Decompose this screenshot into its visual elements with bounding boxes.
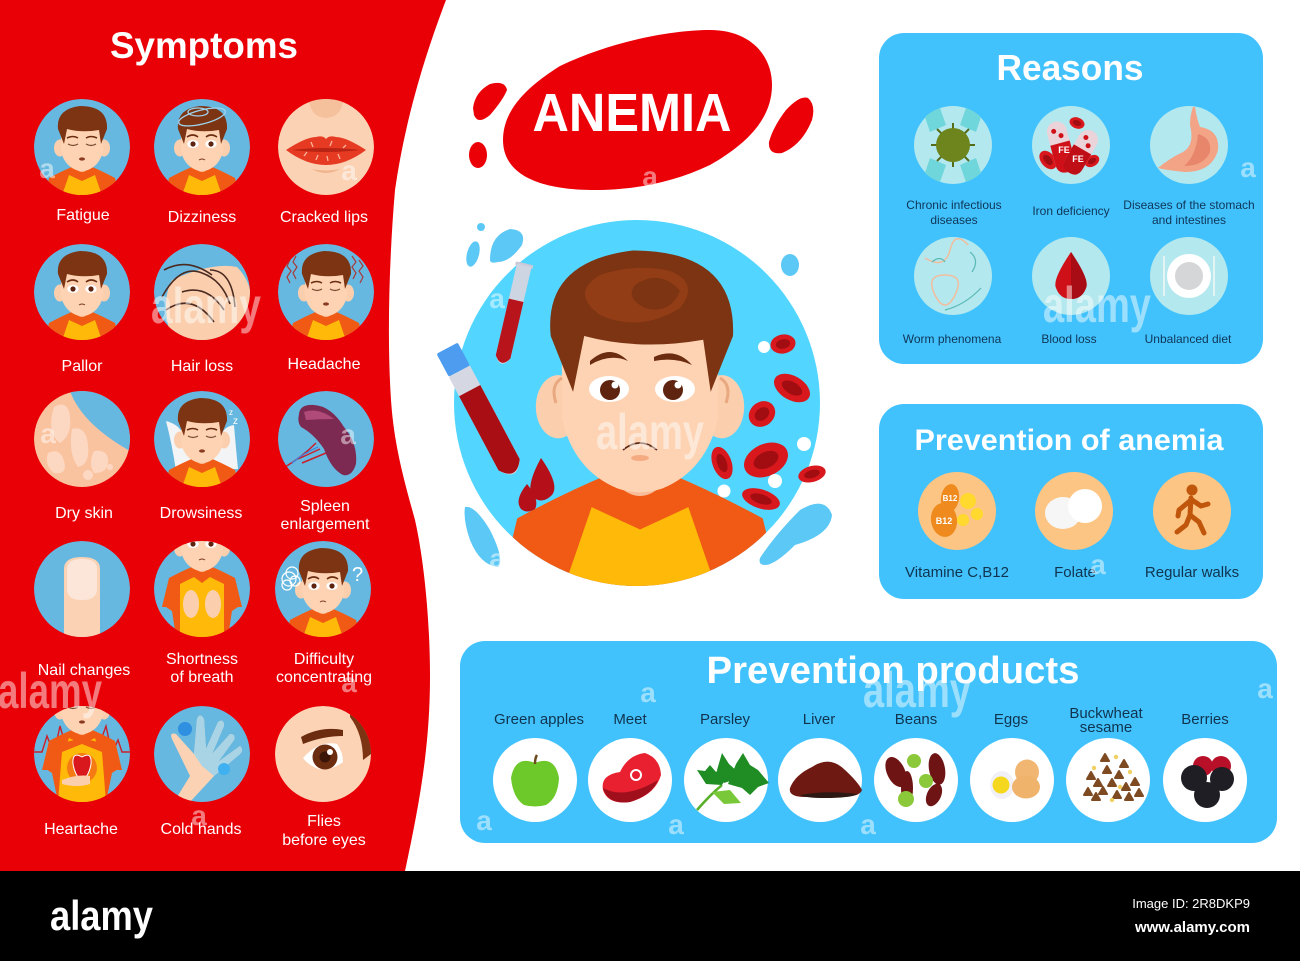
heading: Prevention products [706, 650, 1080, 692]
symptom: headache [278, 244, 374, 373]
symptom: flies before eyes: before eyes [282, 832, 366, 849]
watermarks: alamy [0, 663, 102, 719]
watermarks: a [642, 161, 658, 192]
symptom: heartache [34, 706, 130, 834]
reason: diseases of the stomach: Diseases of the stomach [1123, 198, 1255, 212]
heading: Symptoms: Symptoms [110, 25, 298, 66]
small test tube [493, 261, 533, 366]
footer bar [0, 871, 1300, 961]
symptom: difficulty concentrating: concentrating [276, 669, 372, 686]
product: liver: Liver [803, 711, 835, 728]
prevention: vitamins: B12 [936, 516, 952, 526]
product: green apples [493, 711, 584, 822]
symptom: cold hands: Cold hands [161, 821, 241, 838]
prevention: folate: Folate [1054, 564, 1096, 581]
product: liver [778, 711, 862, 822]
large test tube [437, 343, 524, 479]
panel background [460, 641, 1277, 843]
panel: reasons [879, 33, 1263, 364]
watermarks: a [489, 283, 505, 314]
blue splashes [464, 223, 832, 567]
heading: Prevention of anemia [914, 424, 1224, 457]
symptom: heartache: Heartache [44, 821, 118, 838]
product: meat [588, 711, 672, 822]
reason: iron deficiency: Iron deficiency [1032, 204, 1110, 218]
red blood cells [707, 332, 828, 514]
watermarks: a [489, 543, 505, 574]
symptom: shortness of breath: Shortness [166, 651, 238, 668]
product: berries: Berries [1181, 711, 1229, 728]
panel: prevention of anemia [879, 404, 1263, 599]
reason: diseases of the stomach [1123, 106, 1255, 227]
watermarks: a [1240, 152, 1256, 183]
symptom: shortness of breath: of breath [170, 669, 234, 686]
alamy logo: alamy [50, 892, 154, 939]
symptom: headache: Headache [288, 356, 361, 373]
blue circle [454, 220, 820, 626]
product: eggs: Eggs [994, 711, 1028, 728]
prevention: vitamins: Vitamine C,B12 [905, 564, 1009, 581]
website: www.alamy.com [1134, 919, 1250, 936]
watermarks: a [1257, 673, 1273, 704]
watermarks: alamy [151, 278, 261, 334]
symptom: difficulty concentrating: ? [352, 564, 363, 586]
prevention: regular walks: Regular walks [1145, 564, 1239, 581]
product: beans [874, 711, 958, 822]
image id: Image ID: 2R8DKP9 [1132, 896, 1250, 911]
panel background [879, 404, 1263, 599]
reason: worm phenomena [903, 237, 1002, 346]
watermarks: a [476, 805, 492, 836]
watermarks: a [1090, 549, 1106, 580]
product: eggs [970, 711, 1054, 822]
reason: chronic infectious diseases: diseases [930, 213, 978, 227]
watermarks: a [640, 677, 656, 708]
symptom: spleen enlargement [278, 391, 374, 533]
symptom: dizziness: Dizziness [168, 209, 236, 226]
symptom: nail changes: Nail changes [38, 662, 130, 679]
symptom: nail changes [34, 541, 130, 679]
symptom: hair loss: Hair loss [171, 358, 233, 375]
watermarks: a [668, 809, 684, 840]
watermarks: a [39, 153, 55, 184]
symptom: flies before eyes: Flies [307, 813, 341, 830]
symptom: difficulty concentrating: Difficulty [294, 651, 354, 668]
splash [769, 98, 813, 153]
prevention: regular walks [1145, 472, 1239, 581]
product: parsley: Parsley [700, 711, 751, 728]
symptom: drowsiness: z [233, 416, 238, 427]
blood drops [519, 458, 554, 512]
product: buckwheat and sesame: Buckwheat [1069, 705, 1144, 722]
symptom: pallor: Pallor [62, 358, 103, 375]
product: parsley [684, 711, 769, 822]
watermarks: a [191, 800, 207, 831]
symptom: drowsiness [154, 391, 250, 522]
watermarks: a [341, 155, 357, 186]
splash [469, 142, 487, 168]
symptom: drowsiness: z [229, 408, 233, 417]
watermarks: alamy [863, 662, 971, 718]
title text: ANEMIA [532, 83, 732, 143]
symptom: spleen enlargement: Spleen [300, 498, 350, 515]
reason: iron deficiency: FE [1058, 145, 1070, 155]
watermarks: a [340, 419, 356, 450]
prevention: vitamins [905, 472, 1009, 581]
watermarks [0, 152, 1273, 840]
red blob [503, 30, 772, 190]
product: beans: Beans [895, 711, 937, 728]
reason: diseases of the stomach: and intestines [1152, 213, 1226, 227]
prevention: folate [1035, 472, 1113, 581]
symptom: dry skin: Dry skin [55, 505, 113, 522]
symptom: difficulty concentrating [275, 541, 372, 686]
prevention: vitamins: B12 [943, 494, 958, 503]
panel: prevention products [460, 641, 1277, 843]
panel: symptoms [0, 0, 446, 871]
symptom: flies before eyes [275, 705, 371, 849]
symptom: spleen enlargement: enlargement [281, 516, 370, 533]
symptom: hair loss [154, 244, 252, 375]
watermarks: a [860, 809, 876, 840]
symptom: dry skin [34, 391, 130, 522]
product: meat: Meet [613, 711, 648, 728]
central illustration: boy with anemia [437, 220, 832, 586]
symptom: drowsiness: Drowsiness [160, 505, 242, 522]
reason: blood loss: Blood loss [1041, 332, 1097, 346]
reason: unbalanced diet: Unbalanced diet [1145, 332, 1232, 346]
splash [473, 83, 507, 120]
heading: Reasons: Reasons [996, 47, 1144, 88]
watermarks: alamy [1043, 277, 1151, 333]
watermarks: alamy [596, 404, 704, 460]
watermarks: a [341, 667, 357, 698]
product: buckwheat and sesame: sesame [1080, 719, 1132, 736]
boy face details [554, 268, 728, 461]
reason: worm phenomena: Worm phenomena [903, 332, 1002, 346]
panel background [879, 33, 1263, 364]
symptom: pallor [34, 244, 130, 375]
product: green apples: Green apples [494, 711, 584, 728]
reason: chronic infectious diseases [906, 106, 1002, 227]
symptom: cracked lips: Cracked lips [280, 209, 368, 226]
reason: unbalanced diet [1145, 237, 1232, 346]
watermarks: a [40, 418, 56, 449]
reason: iron deficiency: FE [1072, 154, 1084, 164]
symptom: cracked lips [278, 99, 374, 226]
product: berries [1163, 711, 1247, 822]
reason: chronic infectious diseases: Chronic infectious [906, 198, 1002, 212]
symptom: dizziness [154, 99, 250, 226]
title: ANEMIA [469, 30, 813, 190]
red panel background [0, 0, 446, 871]
symptom: fatigue [34, 99, 130, 224]
symptom: cold hands [154, 706, 250, 838]
symptom: fatigue: Fatigue [56, 207, 110, 224]
product: buckwheat and sesame [1066, 705, 1150, 822]
reason: iron deficiency [1032, 106, 1110, 218]
symptom: shortness of breath [154, 541, 250, 682]
reason: blood loss [1032, 237, 1110, 346]
